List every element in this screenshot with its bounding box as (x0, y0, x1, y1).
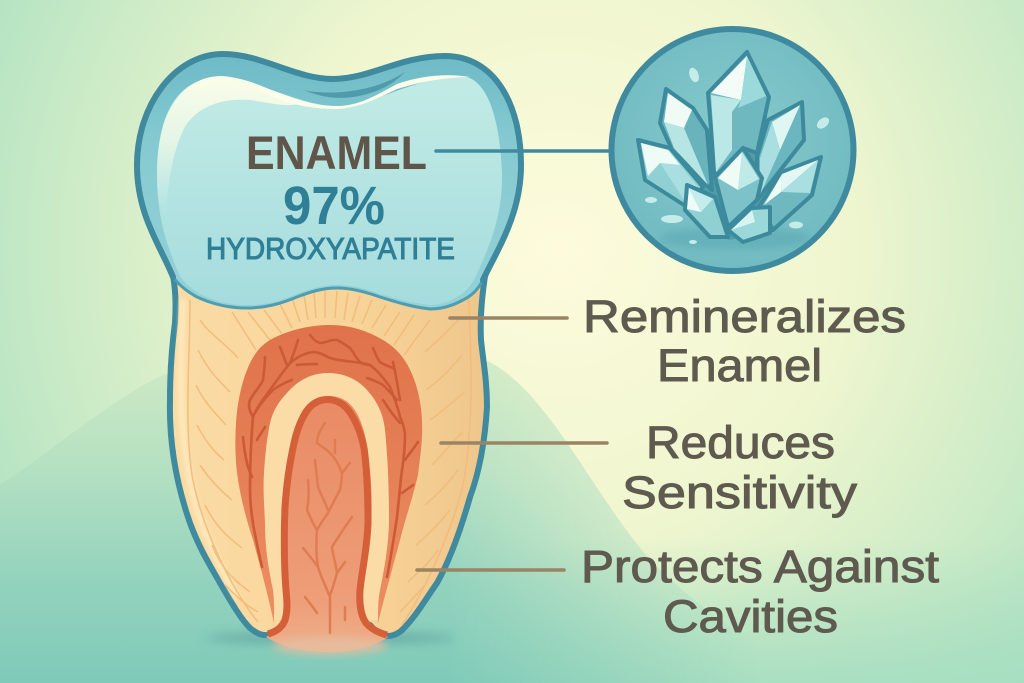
leader line (450, 316, 567, 320)
enamel label (206, 126, 455, 266)
left tall crystal (660, 89, 712, 190)
figure: 97%: 97% (283, 176, 385, 236)
enamel inner face (157, 76, 502, 305)
veins in outer pulp layer (243, 335, 418, 577)
label: Protects Against (581, 541, 940, 592)
light inner edge of root (181, 300, 238, 598)
background hills (0, 358, 1024, 683)
benefit: remineralizes enamel (450, 291, 906, 391)
benefit: remineralizes enamel: Enamel (657, 340, 822, 391)
ground shadow (205, 631, 455, 645)
word: enamel: ENAMEL (246, 126, 427, 179)
enamel crown (137, 54, 521, 309)
leader line (441, 441, 607, 445)
bottom crystal (728, 207, 770, 242)
benefit: protects against cavities (417, 541, 940, 642)
pulp chamber outer layer (235, 325, 422, 623)
label: Reduces (646, 417, 835, 468)
connector: enamel to crystal (436, 149, 612, 153)
pulp wall (268, 400, 387, 635)
far left crystal (638, 140, 703, 207)
tooth root and dentin (170, 270, 487, 636)
cluster backing (690, 130, 775, 240)
bottom left small crystal (685, 185, 728, 237)
tooth (137, 54, 521, 655)
enamel lower edge (173, 277, 483, 309)
pulp veins (303, 423, 352, 633)
crystal shadow (660, 227, 810, 249)
enamel left soft glow (157, 76, 300, 220)
pulp fade at root tip (272, 637, 388, 655)
pulp core (266, 396, 388, 652)
right tall crystal (757, 102, 804, 200)
dentin band around pulp (264, 373, 389, 620)
leader line (417, 568, 564, 572)
dentin tubules (188, 291, 471, 625)
sparkles (645, 66, 831, 244)
word: hydroxyapatite: HYDROXYAPATITE (206, 231, 455, 266)
crystal cluster (638, 52, 821, 242)
centre small crystal (715, 148, 762, 227)
far right crystal (760, 157, 821, 230)
enamel highlight band (250, 75, 470, 109)
badge disc (612, 29, 854, 271)
label: Remineralizes (583, 291, 906, 342)
central tall crystal (708, 52, 769, 177)
benefit: reduces sensitivity (441, 417, 858, 518)
enamel outer outline (137, 54, 521, 280)
benefit: reduces sensitivity: Sensitivity (622, 467, 858, 518)
crystal badge (612, 29, 854, 271)
benefit: protects against cavities: Cavities (663, 591, 838, 642)
occlusal groove (303, 72, 405, 98)
